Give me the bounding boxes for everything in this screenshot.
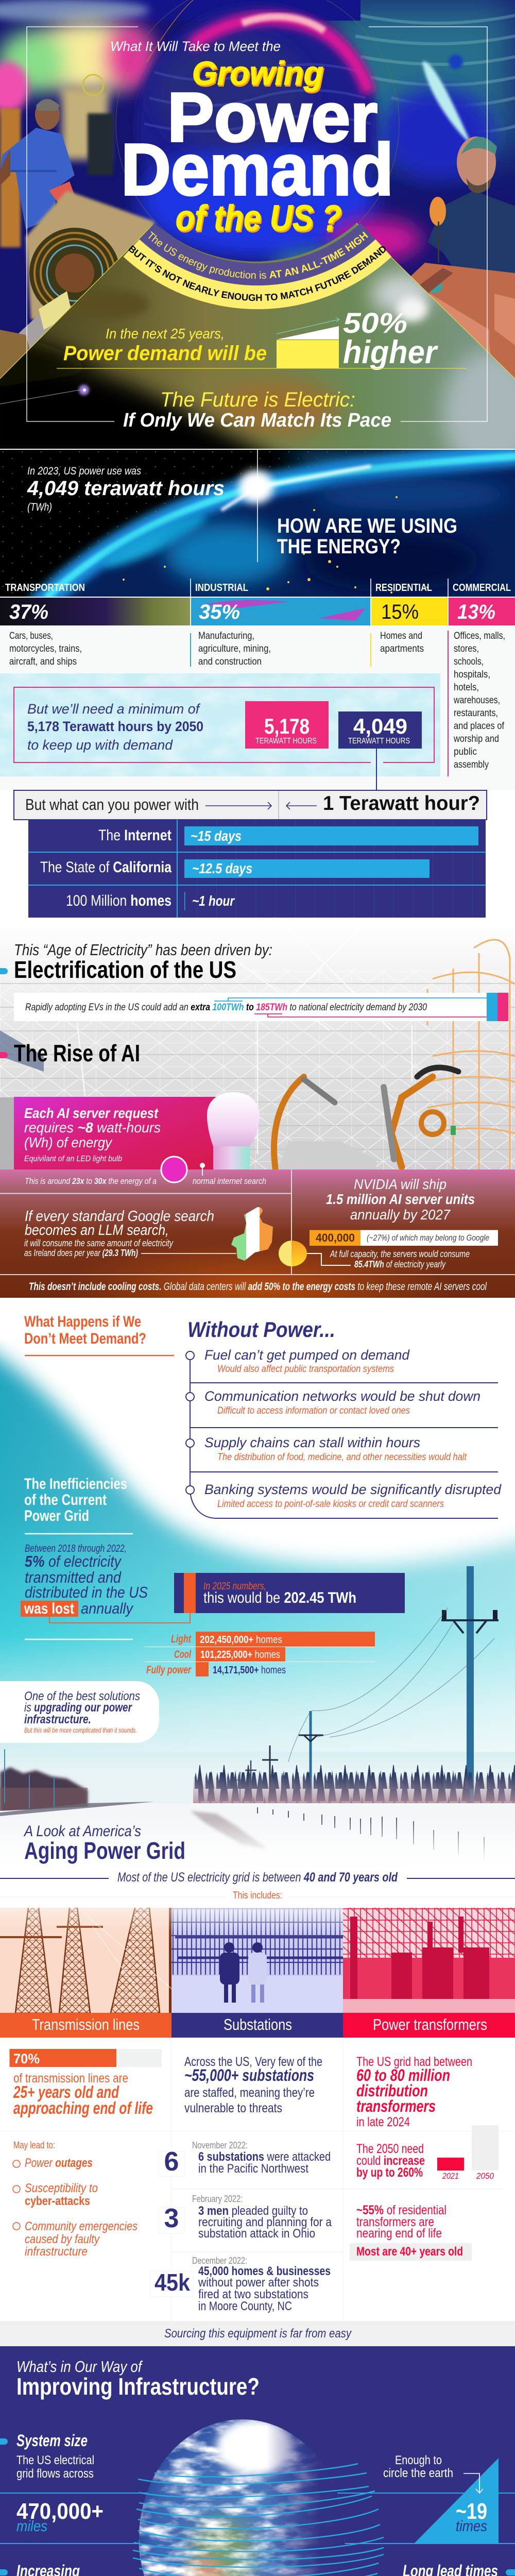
item: supply chains: Supply chains can stall within hours	[204, 1435, 420, 1450]
light blue panel: 5178 needed: to keep up with demand	[27, 737, 173, 753]
heading: what happens: Don’t Meet Demand?	[24, 1330, 146, 1347]
inefficiencies text: The Inefficiencies	[24, 1476, 127, 1493]
copper busbar box	[411, 263, 515, 378]
heading: aging power grid: Aging Power Grid	[24, 1837, 185, 1864]
left worker	[0, 99, 75, 229]
column: power transformers: in late 2024	[356, 2115, 410, 2129]
202.45 TWh box: this would be 202.45 TWh	[203, 1589, 356, 1606]
heading: improving infrastructure: Improving Infrastructure?	[16, 2373, 260, 2400]
industrial description: and construction	[198, 656, 262, 667]
tagline	[123, 388, 391, 431]
system size: System size	[16, 2431, 88, 2450]
right worker	[427, 137, 515, 278]
circle the earth callout	[383, 2453, 499, 2544]
industrial description: Manufacturing,	[198, 631, 254, 641]
AI server request panel: Equivilant of an LED light bulb	[24, 1155, 122, 1163]
teal wave background	[0, 1278, 515, 1906]
row: california: ~12.5 days	[192, 860, 252, 876]
AI server request panel: requires ~8 watt-hours	[24, 1120, 161, 1136]
inefficiencies text: 5% of electricity	[25, 1552, 122, 1570]
commercial description: and places of	[454, 721, 505, 732]
attack: November 2022: 6	[164, 2147, 179, 2177]
5178 box: 5,178	[264, 714, 310, 738]
Google search Ireland comparison: If every standard Google search	[25, 1208, 214, 1225]
attack: December 2022: without power after shots	[198, 2276, 319, 2290]
title: Growing	[193, 56, 324, 93]
this includes label: This includes:	[233, 1890, 282, 1901]
70 percent bar: 70%	[13, 2051, 40, 2066]
column: substations: are staffed, meaning they’re	[184, 2086, 315, 2100]
2023 power use: In 2023, US power use was	[27, 465, 141, 477]
attack: November 2022: November 2022:	[192, 2140, 248, 2150]
item: supply chains	[204, 1435, 467, 1463]
50 percent bar	[277, 307, 438, 370]
title: of the US ?	[176, 198, 341, 238]
column: substations	[150, 2055, 502, 2313]
title: What It Will Take to Meet the	[110, 39, 281, 54]
label: power transformers: Power transformers	[373, 2015, 487, 2033]
may lead to list: cyber-attacks	[25, 2194, 90, 2208]
commercial description: restaurants,	[454, 708, 498, 719]
without power timeline	[186, 1317, 502, 1518]
item: fuel: Fuel can’t get pumped on demand	[204, 1347, 410, 1363]
attack: February 2022: recruiting and planning for a	[198, 2215, 332, 2229]
curved band: production high	[124, 223, 391, 309]
residential description	[371, 631, 424, 667]
column: power transformers: distribution	[356, 2081, 428, 2100]
bar chart: homes: Cool	[174, 1649, 192, 1660]
sector labels: RESIDENTIAL	[375, 582, 432, 594]
NVIDIA servers: (~27%) of which may belong to Google	[367, 1233, 489, 1243]
panel: factory photo background	[0, 922, 515, 1170]
bar chart: homes	[145, 1632, 375, 1676]
residential description: Homes and	[380, 631, 422, 641]
circle the earth callout: times	[456, 2518, 487, 2535]
EV callout strip: Rapidly adopting EVs in the US could add an extra 100TWh to 185TWh to national electricity demand by 2030	[25, 1002, 427, 1013]
may lead to list: caused by faulty	[25, 2232, 100, 2246]
attack: November 2022: 6 substations were attacked	[198, 2150, 331, 2164]
snow field	[0, 1802, 515, 1875]
Google search Ireland comparison: as Ireland does per year (29.3 TWh)	[24, 1248, 138, 1258]
AI server request panel	[14, 1092, 260, 1170]
commercial description: public	[454, 747, 477, 757]
system size: 470,000+	[16, 2499, 104, 2524]
bar chart: what 1 TWh powers	[28, 820, 486, 918]
bar chart: 2021 vs 2050: 2021	[442, 2171, 459, 2181]
solutions pill: infrastructure.	[24, 1713, 91, 1726]
column: power transformers: ~55% of residential	[356, 2203, 447, 2217]
column: transmission lines	[9, 2049, 162, 2259]
may lead to list: infrastructure	[25, 2245, 88, 2259]
attack: February 2022: 3	[164, 2204, 179, 2233]
sector labels	[5, 582, 511, 594]
label: power transformers	[343, 2013, 515, 2038]
4049 box: TERAWATT HOURS	[348, 737, 410, 745]
column: power transformers: transformers are	[356, 2215, 434, 2229]
202.45 TWh box: In 2025 numbers,	[203, 1581, 266, 1592]
panel: hero header	[0, 0, 515, 449]
title: Growing	[192, 55, 323, 92]
NVIDIA servers: 400,000	[316, 1231, 355, 1244]
commercial description: assembly	[454, 759, 489, 770]
sourcing band	[0, 2321, 515, 2346]
column: power transformers: by up to 260%	[356, 2165, 423, 2180]
heading: age of electricity: This “Age of Electricity” has been driven by:	[14, 941, 272, 959]
title: Demand	[121, 129, 393, 211]
inefficiencies text	[21, 1476, 190, 1639]
may lead to list: Power outages	[25, 2156, 93, 2170]
inefficiencies text: Between 2018 through 2022,	[25, 1543, 127, 1554]
label bars	[0, 2013, 515, 2038]
column: transmission lines: of transmission lines are	[13, 2071, 128, 2086]
heading: improving infrastructure	[16, 2358, 260, 2400]
treeline right	[193, 1765, 515, 1806]
heading: improving infrastructure: What’s in Our Way of	[16, 2358, 143, 2376]
item: banking: Limited access to point-of-sale kiosks or credit card scanners	[217, 1499, 444, 1510]
column: power transformers: The US grid had between	[356, 2055, 472, 2069]
panel: substations photo	[171, 1908, 343, 2013]
sector share strip: 35%	[199, 601, 240, 623]
solutions pill: But this will be more complicated than it sounds.	[24, 1726, 137, 1734]
icon: light bulb	[207, 1092, 260, 1170]
commercial description: hotels,	[454, 682, 479, 693]
row: internet: ~15 days	[191, 828, 242, 844]
system size: The US electrical	[16, 2453, 94, 2467]
attack: November 2022	[159, 2140, 331, 2177]
orange safety cage	[427, 940, 515, 1170]
title	[110, 39, 393, 240]
NVIDIA servers: 1.5 million AI server units	[326, 1191, 475, 1207]
transportation description: aircraft, and ships	[9, 656, 77, 667]
5178 box	[245, 701, 329, 749]
panel: energy use space photo	[0, 450, 515, 618]
sourcing band: Sourcing this equipment is far from easy	[164, 2327, 352, 2341]
item: communication	[204, 1388, 480, 1416]
label: substations	[171, 2013, 343, 2038]
Google search Ireland comparison: it will consume the same amount of electricity	[24, 1238, 174, 1248]
inefficiencies text: transmitted and	[25, 1568, 122, 1586]
attack: February 2022: 3 men pleaded guilty to	[198, 2204, 308, 2218]
attack: December 2022: December 2022:	[192, 2256, 247, 2266]
globe with rings	[133, 2419, 384, 2576]
solutions pill: is upgrading our power	[24, 1701, 132, 1715]
panel: what's in our way	[0, 2346, 515, 2576]
column: power transformers: Most are 40+ years old	[356, 2245, 463, 2259]
heading: age of electricity: Electrification of the US	[14, 956, 236, 983]
attack: November 2022: in the Pacific Northwest	[198, 2162, 308, 2176]
attack: December 2022: in Moore County, NC	[198, 2299, 292, 2313]
may lead to list: Community emergencies	[25, 2219, 138, 2233]
title: of the US ?	[177, 199, 342, 240]
curved band text: future demand: BUT IT’S NOT NEARLY ENOUGH TO MATCH FUTURE DEMAND	[128, 245, 386, 301]
bar chart: homes: Light	[171, 1633, 192, 1645]
NVIDIA servers: NVIDIA will ship	[354, 1176, 447, 1192]
NVIDIA servers: 85.4TWh of electricity yearly	[354, 1259, 446, 1269]
circle the earth callout: Enough to	[395, 2453, 442, 2467]
item: communication: Communication networks would be shut down	[204, 1388, 480, 1404]
row: california	[40, 859, 430, 878]
solutions pill: One of the best solutions	[24, 1689, 140, 1703]
row: internet: The Internet	[98, 827, 171, 844]
NVIDIA servers	[307, 1176, 498, 1269]
panel: power transformers photo	[343, 1908, 515, 2013]
column: power transformers	[350, 2055, 499, 2261]
Google search Ireland comparison: becomes an LLM search,	[25, 1222, 169, 1239]
commercial description: stores,	[454, 643, 479, 654]
attack: December 2022: 45k	[154, 2269, 190, 2296]
system size	[0, 2431, 104, 2535]
25 years text: In the next 25 years,	[106, 326, 225, 342]
tagline: The Future is Electric:	[160, 388, 355, 411]
inefficiencies text: annually	[81, 1600, 134, 1617]
column: substations: Across the US, Very few of the	[184, 2055, 322, 2069]
transportation description	[9, 631, 82, 667]
circle the earth callout: circle the earth	[383, 2466, 453, 2480]
internet search comparison	[25, 1157, 266, 1186]
one terawatt hour header	[14, 790, 487, 820]
AI server request panel: (Wh) of energy	[24, 1134, 113, 1150]
panel: AI energy brown	[0, 1157, 515, 1334]
bar chart: homes: Fully power	[146, 1664, 192, 1676]
left machine	[0, 191, 154, 402]
commercial description: worship and	[453, 734, 499, 744]
50 percent bar: higher	[343, 334, 438, 370]
system size: miles	[16, 2518, 47, 2535]
may lead to list: Susceptibility to	[25, 2181, 98, 2195]
heading: how are we using the energy: THE ENERGY?	[277, 535, 401, 558]
EV callout strip	[14, 993, 508, 1021]
transportation description: motorcycles, trains,	[9, 643, 82, 654]
frame lines	[27, 27, 487, 421]
panel: transmission lines photo	[0, 1908, 171, 2013]
sector share strip: 37%	[9, 601, 48, 623]
50 percent bar: 50%	[343, 307, 407, 339]
increasing equipment prices	[0, 2562, 144, 2576]
commercial description: Offices, malls,	[454, 631, 505, 641]
may lead to list: May lead to:	[13, 2140, 55, 2151]
half sun pair	[279, 1241, 307, 1266]
item: banking	[204, 1482, 502, 1510]
heading: how are we using the energy: HOW ARE WE USING	[277, 515, 457, 537]
robot arms	[274, 1067, 458, 1170]
label: transmission lines	[0, 2013, 171, 2038]
column: substations: vulnerable to threats	[184, 2101, 282, 2115]
column: substations: ~55,000+ substations	[184, 2066, 314, 2084]
attack: December 2022	[150, 2256, 331, 2313]
heading: aging power grid	[23, 1823, 185, 1864]
column: transmission lines: approaching end of life	[13, 2098, 153, 2117]
attack: December 2022: 45,000 homes & businesses	[198, 2264, 331, 2278]
item: supply chains: The distribution of food, medicine, and other necessities would halt	[217, 1452, 467, 1463]
without power timeline: Without Power...	[187, 1317, 335, 1342]
AI server request panel: Each AI server request	[24, 1105, 159, 1121]
5178 box: TERAWATT HOURS	[255, 737, 317, 745]
label: substations: Substations	[224, 2015, 292, 2033]
commercial description: warehouses,	[453, 695, 500, 706]
transportation description: Cars, buses,	[9, 631, 53, 641]
grid age statement: Most of the US electricity grid is between 40 and 70 years old	[117, 1870, 398, 1885]
commercial description: schools,	[454, 656, 484, 667]
bar chart: homes: 101,225,000+ homes	[200, 1649, 280, 1660]
inefficiencies text: of the Current	[24, 1492, 107, 1509]
column: power transformers: 60 to 80 million	[356, 2066, 450, 2084]
hero background photo collage	[0, 0, 515, 474]
Google search Ireland comparison	[24, 1207, 273, 1261]
sector share strip	[0, 579, 515, 625]
2023 power use: (TWh)	[27, 501, 52, 513]
inefficiencies text: Power Grid	[24, 1507, 89, 1524]
tagline: If Only We Can Match Its Pace	[123, 410, 391, 431]
column: power transformers: nearing end of life	[356, 2226, 442, 2241]
may lead to list	[13, 2140, 138, 2259]
earth view	[0, 223, 515, 449]
commercial description: hospitals,	[454, 669, 490, 680]
NVIDIA servers: At full capacity, the servers would consume	[330, 1249, 470, 1259]
heading: how are we using the energy	[277, 515, 457, 558]
attack: February 2022	[159, 2194, 332, 2241]
heading: rise of AI: The Rise of AI	[14, 1040, 140, 1066]
plane	[0, 385, 89, 404]
heading: what happens: What Happens if We	[24, 1313, 141, 1330]
label: transmission lines: Transmission lines	[32, 2015, 140, 2033]
bar chart: 2021 vs 2050	[437, 2125, 499, 2181]
column: transmission lines: 25+ years old and	[13, 2082, 119, 2102]
circle the earth callout: ~19	[456, 2499, 487, 2524]
4049 box: 4,049	[353, 714, 407, 738]
bar chart: homes: 202,450,000+ homes	[200, 1634, 282, 1646]
commercial description	[448, 631, 505, 776]
4049 box	[338, 711, 422, 749]
row: homes: 100 Million homes	[66, 892, 171, 909]
solutions pill	[0, 1681, 159, 1743]
two workers	[220, 1942, 267, 2003]
item: banking: Banking systems would be significantly disrupted	[204, 1482, 502, 1497]
25 years text: Power demand will be	[63, 342, 267, 365]
icon: Ireland map	[231, 1207, 273, 1261]
residential description: apartments	[380, 643, 424, 654]
bar chart: homes: 14,171,500+ homes	[213, 1665, 286, 1676]
system size: grid flows across	[16, 2467, 94, 2481]
row: internet	[98, 826, 478, 845]
industrial description	[191, 631, 271, 667]
bar chart: 2021 vs 2050: 2050	[476, 2171, 494, 2181]
one terawatt hour header: But what can you power with	[25, 795, 199, 814]
sector descriptions	[0, 625, 515, 790]
inefficiencies text: was lost	[24, 1600, 74, 1617]
internet search comparison: This is around 23x to 30x the energy of a	[25, 1176, 157, 1186]
heading: what happens	[24, 1313, 174, 1355]
light blue panel: 5178 needed: But we’ll need a minimum of	[27, 701, 200, 717]
25 years text	[63, 326, 267, 365]
column: power transformers: could increase	[356, 2154, 425, 2168]
2023 power use: 4,049 terawatt hours	[27, 477, 225, 500]
column: power transformers: The 2050 need	[356, 2142, 424, 2156]
attack: December 2022: fired at two substations	[198, 2287, 308, 2301]
title: Power	[167, 78, 377, 156]
202.45 TWh box	[174, 1573, 405, 1613]
one terawatt hour header: 1 Terawatt hour?	[323, 792, 480, 815]
2023 power use	[27, 465, 225, 513]
landscape photo	[0, 1566, 515, 1875]
sector share strip: 13%	[457, 601, 495, 623]
item: fuel: Would also affect public transportation systems	[217, 1364, 394, 1375]
industrial description: agriculture, mining,	[198, 643, 271, 654]
light blue panel: 5178 needed	[0, 673, 440, 776]
sector labels: INDUSTRIAL	[195, 582, 248, 594]
item: communication: Difficult to access information or contact loved ones	[217, 1405, 410, 1416]
sector labels: TRANSPORTATION	[5, 582, 85, 594]
curved band: production high: The US energy production is AT AN ALL-TIME HIGH	[148, 231, 368, 279]
sector share strip: 15%	[381, 601, 419, 623]
row: homes	[66, 892, 235, 910]
treeline left	[0, 1749, 88, 1812]
heading: age of electricity	[0, 941, 272, 983]
attack: February 2022: February 2022:	[192, 2194, 243, 2204]
inefficiencies text: distributed in the US	[25, 1583, 148, 1601]
item: fuel	[204, 1347, 410, 1375]
column: power transformers: transformers	[356, 2097, 436, 2115]
NVIDIA servers: annually by 2027	[350, 1207, 451, 1223]
light blue panel: 5178 needed: 5,178 Terawatt hours by 2050	[27, 719, 203, 734]
earth horizon photo	[0, 450, 515, 618]
row: california: The State of California	[40, 859, 171, 876]
row: homes: ~1 hour	[192, 893, 235, 909]
attack: February 2022: substation attack in Ohio	[198, 2227, 315, 2241]
70 percent bar	[9, 2049, 162, 2067]
heading: aging power grid: A Look at America’s	[23, 1823, 141, 1840]
internet search comparison: normal internet search	[193, 1176, 266, 1186]
